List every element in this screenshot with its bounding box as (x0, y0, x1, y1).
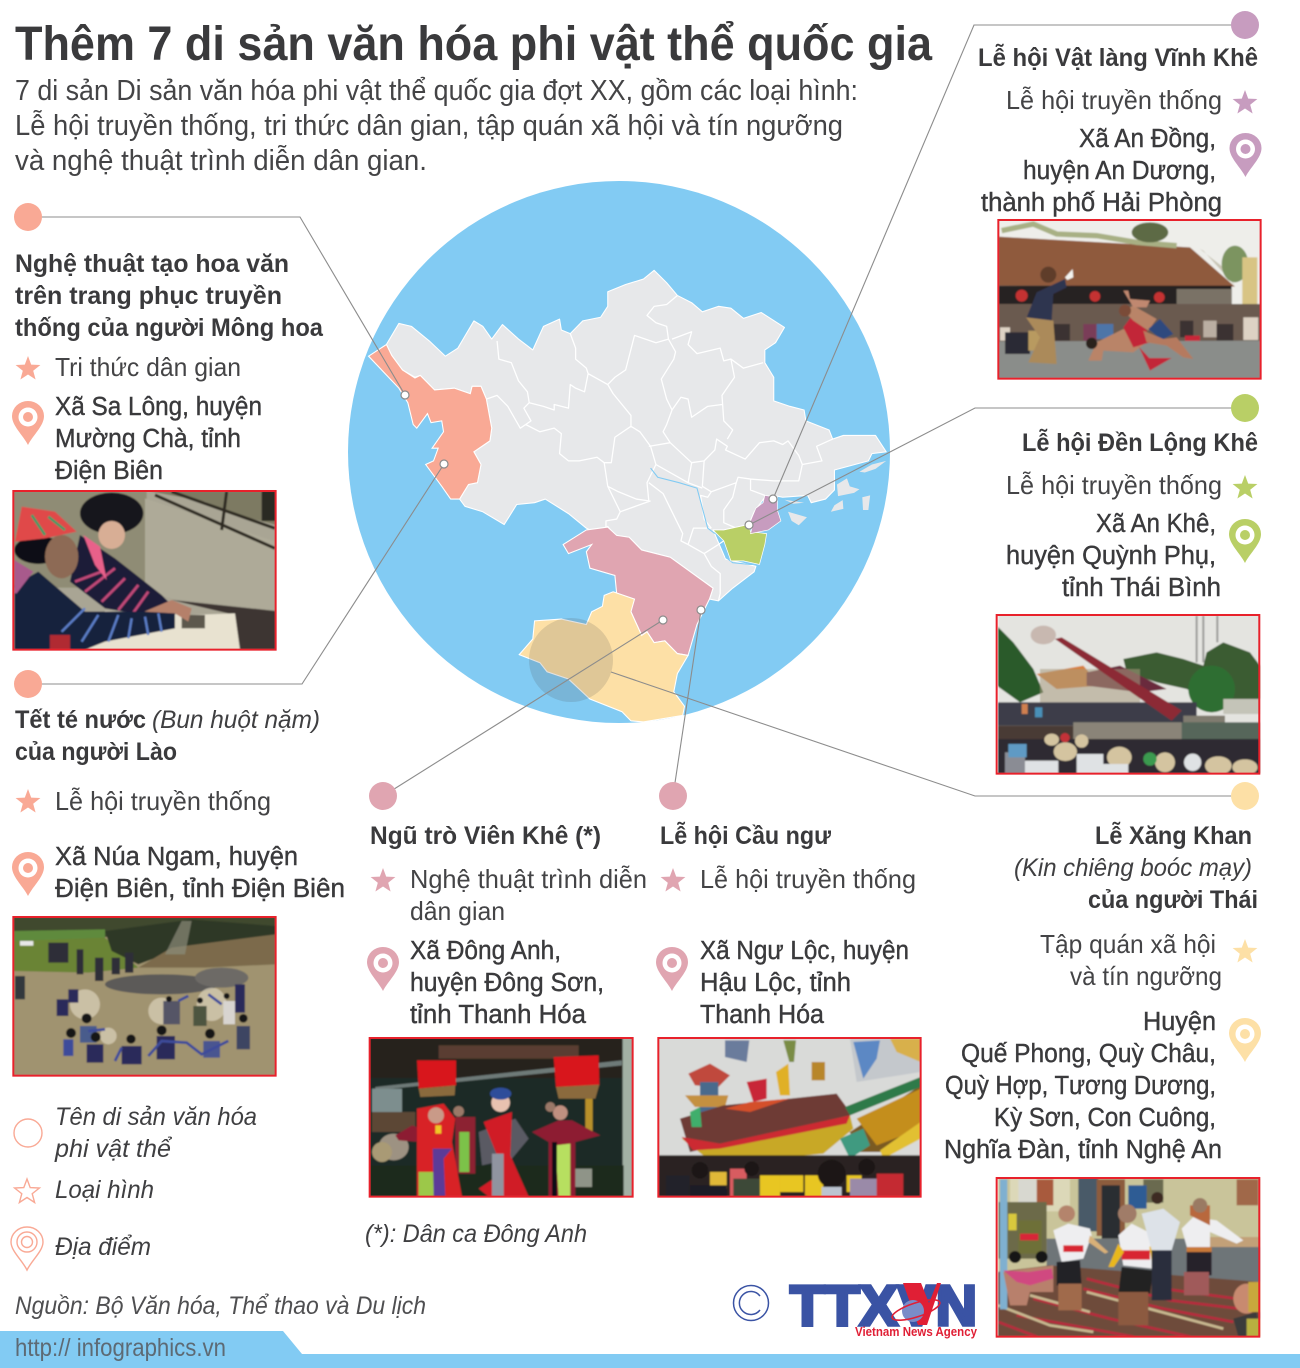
icon: copyright (734, 1286, 768, 1320)
icon: star (1233, 939, 1257, 962)
panel: Lễ hội Vật làng Vĩnh Khê (978, 11, 1262, 379)
location (1006, 510, 1221, 602)
icon: star (16, 356, 40, 380)
location: Thanh Hóa (700, 1001, 825, 1029)
heading: (Bun huột nặm) (152, 706, 320, 734)
icon: pin (12, 852, 44, 896)
icon: star (661, 868, 685, 892)
intro text: 7 di sản Di sản văn hóa phi vật thể quốc gia đợt XX, gồm các loại hình: (15, 75, 858, 107)
photo: wrestling (998, 220, 1261, 379)
location: Xã Núa Ngam, huyện (55, 843, 298, 871)
heading: Lễ hội Vật làng Vĩnh Khê (978, 42, 1258, 72)
heading: Nghệ thuật tạo hoa văn (15, 250, 289, 278)
category: Lễ hội truyền thống (55, 786, 271, 816)
legend icon: circle (14, 1119, 42, 1147)
legend text: name: phi vật thể (54, 1135, 172, 1163)
legend text: name (54, 1103, 257, 1163)
source: Nguồn: Bộ Văn hóa, Thể thao và Du lịch (15, 1292, 426, 1320)
icon: star (371, 868, 395, 892)
icon: pin (656, 947, 688, 991)
legend text: location: Địa điểm (55, 1233, 151, 1261)
location (55, 393, 262, 485)
title: Thêm 7 di sản văn hóa phi vật thể quốc gia (15, 18, 932, 71)
heading: Tết té nước (15, 706, 146, 734)
category: Tập quán xã hội (1040, 929, 1216, 959)
location: Quế Phong, Quỳ Châu, (961, 1040, 1216, 1068)
photo: performers on stage (369, 1038, 633, 1197)
intro text: Lễ hội truyền thống, tri thức dân gian, tập quán xã hội và tín ngưỡng (15, 110, 843, 142)
location: tỉnh Thanh Hóa (410, 1001, 587, 1029)
marker circle (1231, 782, 1259, 810)
category: Lễ hội truyền thống (1006, 470, 1222, 500)
photo: embroidery (13, 491, 276, 650)
location: Điện Biên (55, 457, 163, 485)
panel: legend (11, 1103, 257, 1270)
marker circle (1231, 394, 1259, 422)
photo: decorated boat (658, 1038, 921, 1197)
category (1040, 929, 1222, 991)
logotype: TTXVN (790, 1274, 977, 1338)
province: Hải Phòng (purple) (751, 495, 781, 534)
category (410, 864, 647, 926)
map: northern Vietnam in a blue circle (348, 181, 890, 723)
location: thành phố Hải Phòng (981, 189, 1222, 217)
location: huyện Đông Sơn, (410, 969, 604, 997)
panel: Lễ Xăng Khan (944, 782, 1261, 1337)
legend text: type: Loại hình (55, 1176, 154, 1204)
icon: star (1233, 475, 1257, 498)
location: Quỳ Hợp, Tương Dương, (945, 1072, 1216, 1100)
panel: Lễ hội Đền Lộng Khê (997, 394, 1261, 775)
marker circle (659, 782, 687, 810)
province: Nghệ An (yellow) (519, 592, 688, 722)
category: Nghệ thuật trình diễn (410, 864, 647, 894)
province: Thái Bình (green) (713, 525, 767, 565)
icon: star (16, 789, 40, 812)
icon: pin (1229, 519, 1261, 563)
heading: Ngũ trò Viên Khê (*) (370, 822, 601, 850)
heading: của người Thái (1088, 886, 1258, 914)
location: Hậu Lộc, tỉnh (700, 969, 851, 997)
heading: (Kin chiêng boóc mạy) (1014, 854, 1252, 882)
photo: raising the pole (997, 615, 1260, 775)
logo: red V and globe (890, 1283, 942, 1325)
location: tỉnh Thái Bình (1062, 574, 1221, 602)
heading (15, 706, 320, 766)
location (700, 937, 909, 1029)
legend icon: star (15, 1179, 39, 1202)
icon: pin (367, 947, 399, 991)
heading: của người Lào (15, 738, 177, 766)
logo: copyright and TTXVN (734, 1274, 977, 1339)
location: Điện Biên, tỉnh Điện Biên (55, 875, 345, 903)
category: và tín ngưỡng (1070, 961, 1222, 991)
category: Lễ hội truyền thống (700, 864, 916, 894)
icon: pin (1230, 133, 1262, 177)
province: Thanh Hóa (rose) (563, 527, 713, 655)
location (55, 843, 345, 903)
category: Tri thức dân gian (55, 352, 241, 382)
heading: Lễ hội Đền Lộng Khê (1022, 427, 1258, 457)
location: Huyện (1143, 1008, 1216, 1036)
marker circle (14, 670, 42, 698)
panel: Tết té nước (12, 670, 345, 1076)
marker circle (369, 782, 397, 810)
heading (1014, 820, 1258, 914)
category: dân gian (410, 896, 505, 926)
legend text: name: Tên di sản văn hóa (55, 1103, 257, 1131)
location: Mường Chà, tỉnh (55, 425, 241, 453)
location: huyện Quỳnh Phụ, (1006, 542, 1216, 570)
heading: trên trang phục truyền (15, 282, 282, 310)
location: Kỳ Sơn, Con Cuông, (994, 1104, 1216, 1132)
footnote: (*): Dân ca Đông Anh (365, 1220, 587, 1248)
footer bar (0, 1331, 1300, 1368)
website: http:// infographics.vn (15, 1334, 226, 1362)
map provinces (369, 270, 886, 722)
intro text (15, 75, 858, 177)
location: Xã Sa Lông, huyện (55, 393, 262, 421)
province: Điện Biên (orange) (369, 345, 492, 499)
panel: Nghệ thuật tạo hoa văn (12, 203, 324, 650)
icon: pin (12, 401, 44, 445)
location: huyện An Dương, (1023, 157, 1216, 185)
location (981, 125, 1222, 217)
lens circle over Tây Nghệ An (529, 618, 613, 702)
photo: bamboo dance (997, 1178, 1260, 1337)
icon: star (1233, 90, 1257, 114)
heading: Lễ Xăng Khan (1095, 820, 1252, 850)
location: Xã Đông Anh, (410, 937, 561, 965)
location (410, 937, 604, 1029)
marker circle (14, 203, 42, 231)
panel: Ngũ trò Viên Khê (365, 782, 647, 1248)
panel: Lễ hội Cầu ngư (656, 782, 921, 1197)
logo subtitle: Vietnam News Agency (855, 1325, 977, 1339)
photo: water splashing (13, 917, 276, 1076)
location: Xã Ngư Lộc, huyện (700, 937, 909, 965)
icon: pin (1229, 1018, 1261, 1062)
location (944, 1008, 1222, 1164)
intro text: và nghệ thuật trình diễn dân gian. (15, 145, 427, 177)
map background circle (348, 181, 890, 723)
marker circle (1231, 11, 1259, 39)
location: Nghĩa Đàn, tỉnh Nghệ An (944, 1136, 1222, 1164)
heading (15, 250, 324, 342)
category: Lễ hội truyền thống (1006, 85, 1222, 115)
heading: thống của người Mông hoa (15, 314, 324, 342)
legend icon: pin (11, 1227, 43, 1270)
heading: Lễ hội Cầu ngư (660, 820, 832, 850)
location: Xã An Khê, (1096, 510, 1216, 538)
location: Xã An Đồng, (1079, 125, 1216, 153)
leader lines (28, 25, 1245, 796)
